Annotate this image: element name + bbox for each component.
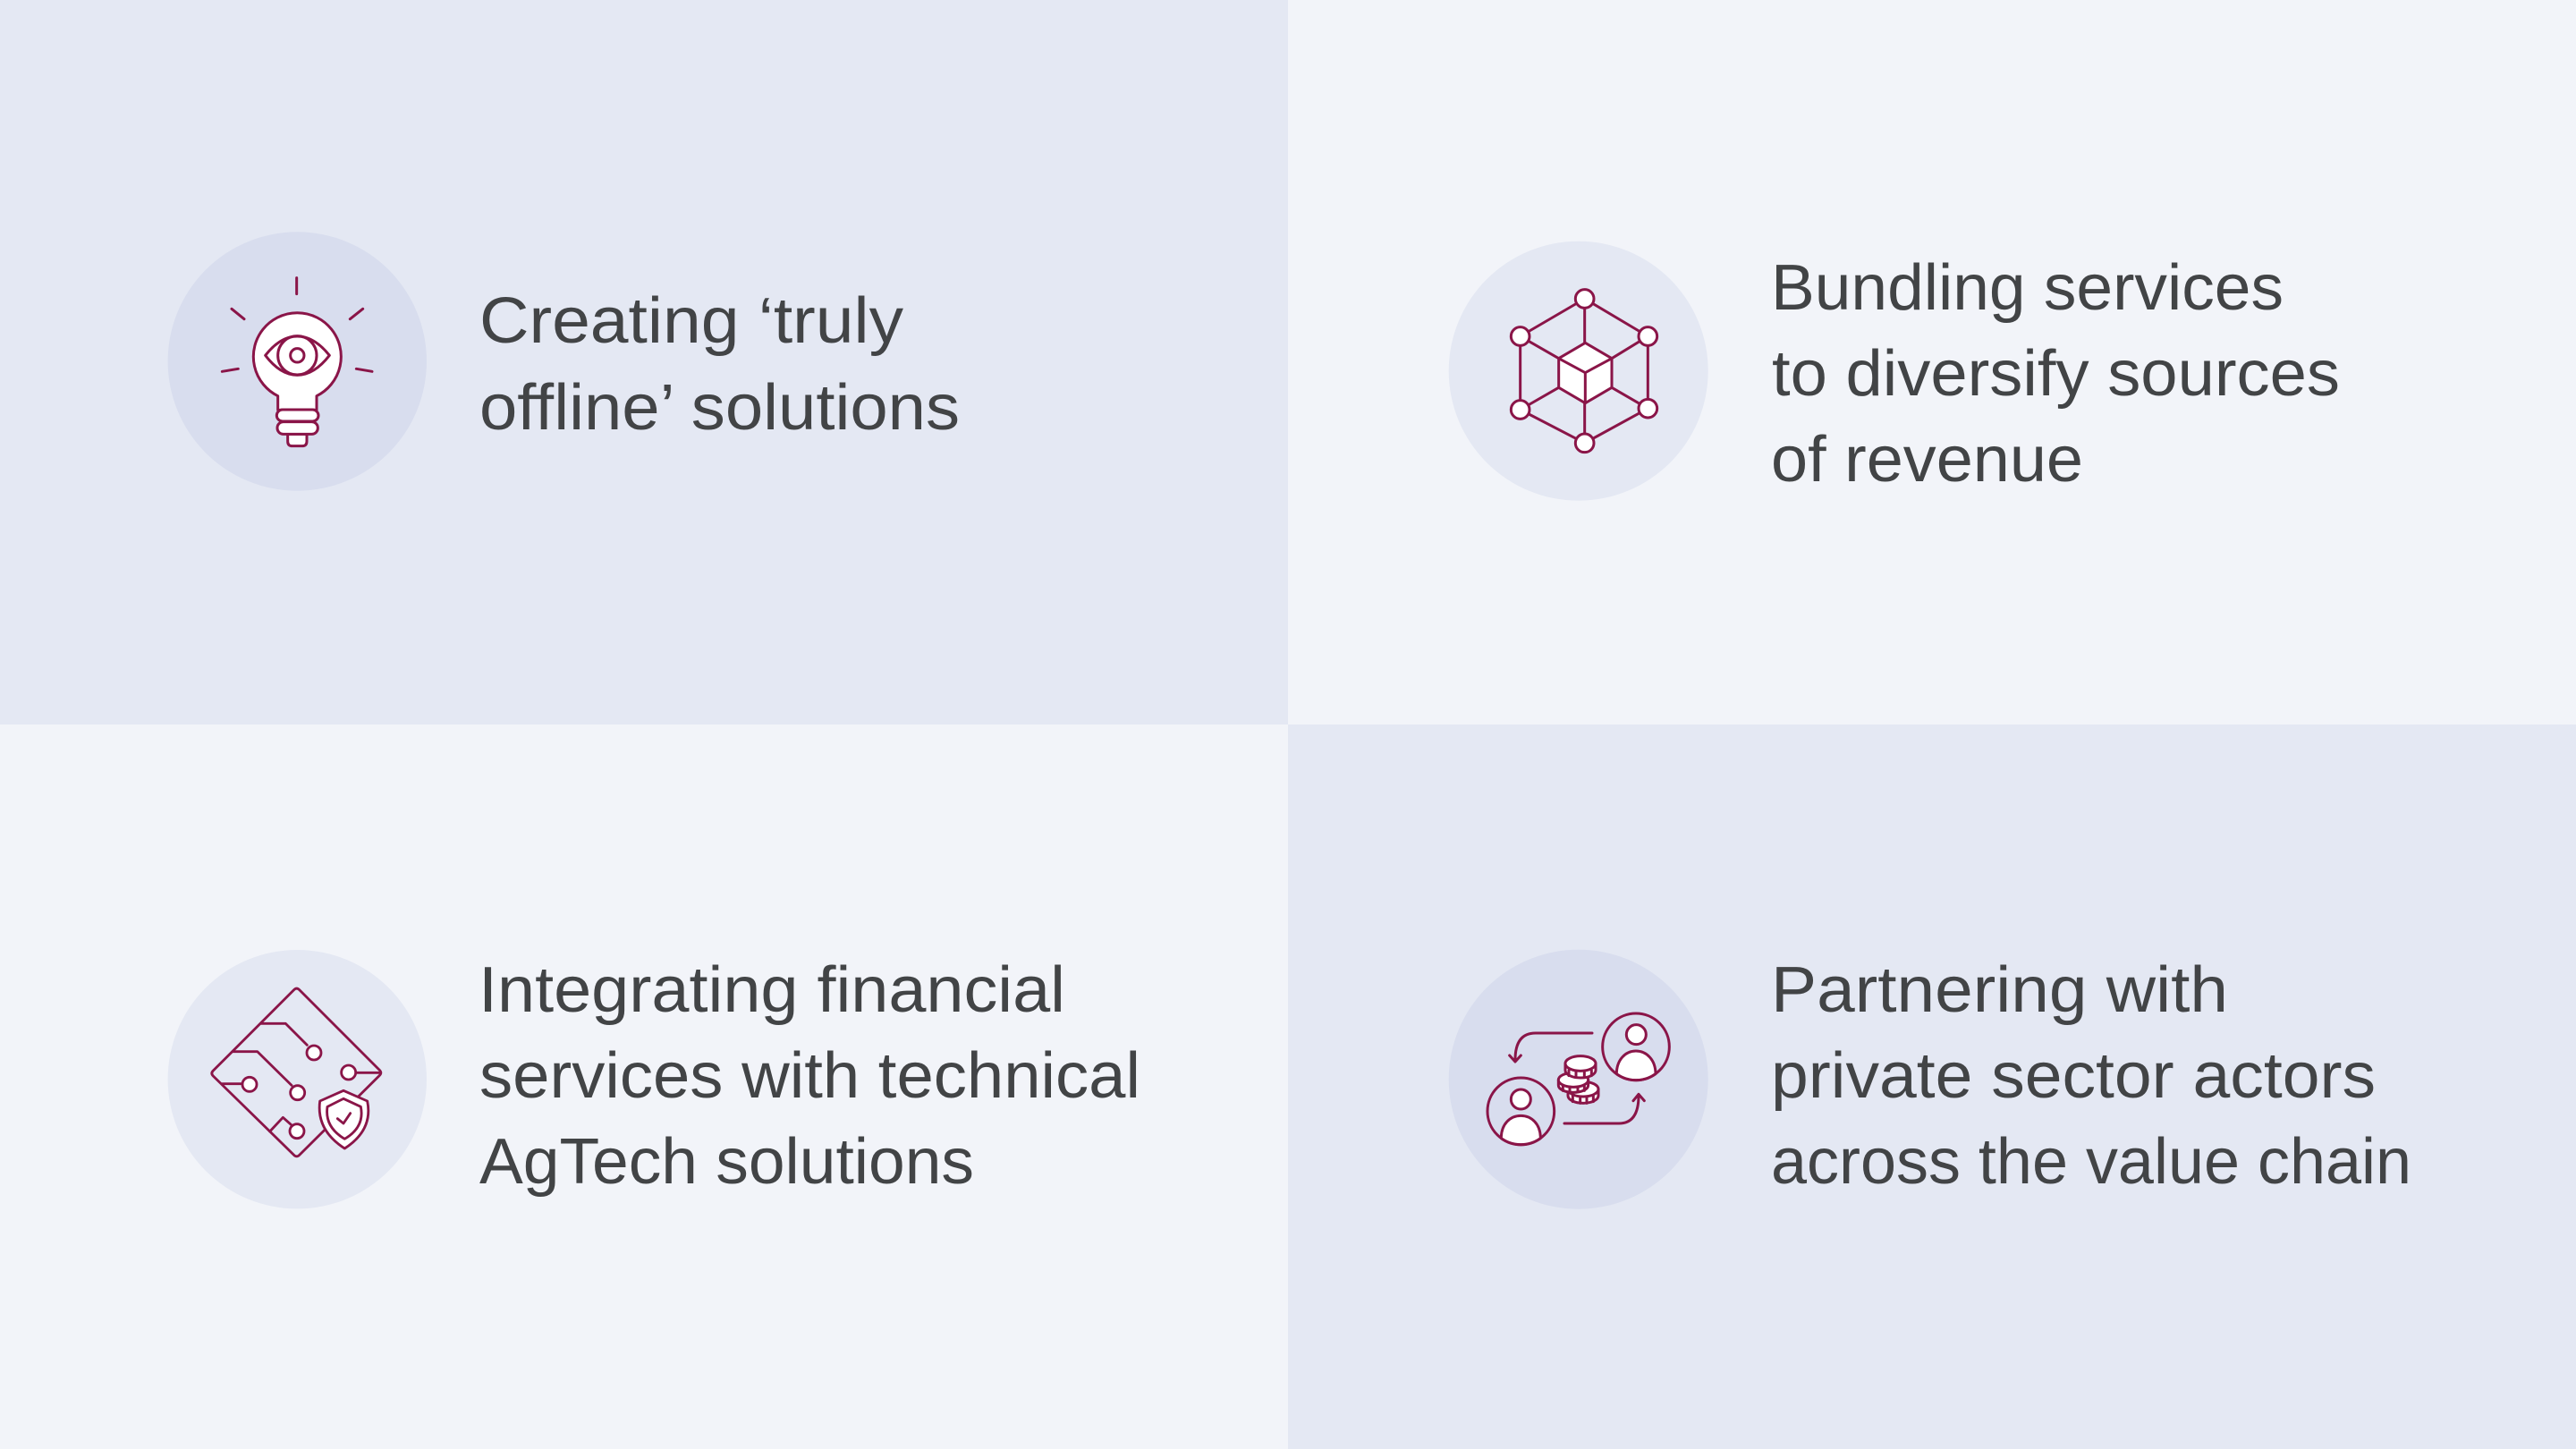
- panel: partnering with private sector: [1288, 724, 2576, 1449]
- icon: two people exchanging coins: [1487, 1013, 1669, 1145]
- text: partnering with private sector actors across the value chain: private sector actors: [1771, 1040, 2376, 1112]
- text: bundling services to diversify sources of revenue: to diversify sources: [1772, 338, 2340, 410]
- text: creating truly offline solutions: offline’ solutions: [479, 372, 960, 444]
- text: integrating financial services with technical agtech solutions: AgTech solutions: [479, 1126, 974, 1198]
- text: bundling services to diversify sources of revenue: of revenue: [1771, 424, 2083, 496]
- text: partnering with private sector actors across the value chain: across the value chain: [1771, 1126, 2411, 1198]
- text: bundling services to diversify sources of revenue: Bundling services: [1771, 252, 2284, 324]
- icon: light bulb with eye: [222, 278, 372, 446]
- text: partnering with private sector actors across the value chain: [1771, 954, 2411, 1198]
- icon: network cube: [1511, 290, 1657, 453]
- panel: integrating financial services: [0, 724, 1288, 1449]
- icon badge circle: [1449, 242, 1708, 501]
- panel: truly offline solutions: [0, 0, 1288, 724]
- text: creating truly offline solutions: Creating ‘truly: [479, 285, 903, 357]
- text: integrating financial services with technical agtech solutions: Integrating financial: [479, 954, 1065, 1026]
- icon: circuit board with shield: [212, 988, 381, 1157]
- icon badge circle: [168, 950, 427, 1208]
- text: integrating financial services with technical agtech solutions: [479, 954, 1140, 1198]
- text: integrating financial services with technical agtech solutions: services with technical: [479, 1040, 1140, 1112]
- icon badge circle: [1449, 950, 1708, 1209]
- icon badge circle: [168, 232, 427, 491]
- panel: bundling services: [1288, 0, 2576, 724]
- text: bundling services to diversify sources of revenue: [1771, 252, 2340, 496]
- text: creating truly offline solutions: [479, 285, 960, 444]
- text: partnering with private sector actors across the value chain: Partnering with: [1771, 954, 2228, 1026]
